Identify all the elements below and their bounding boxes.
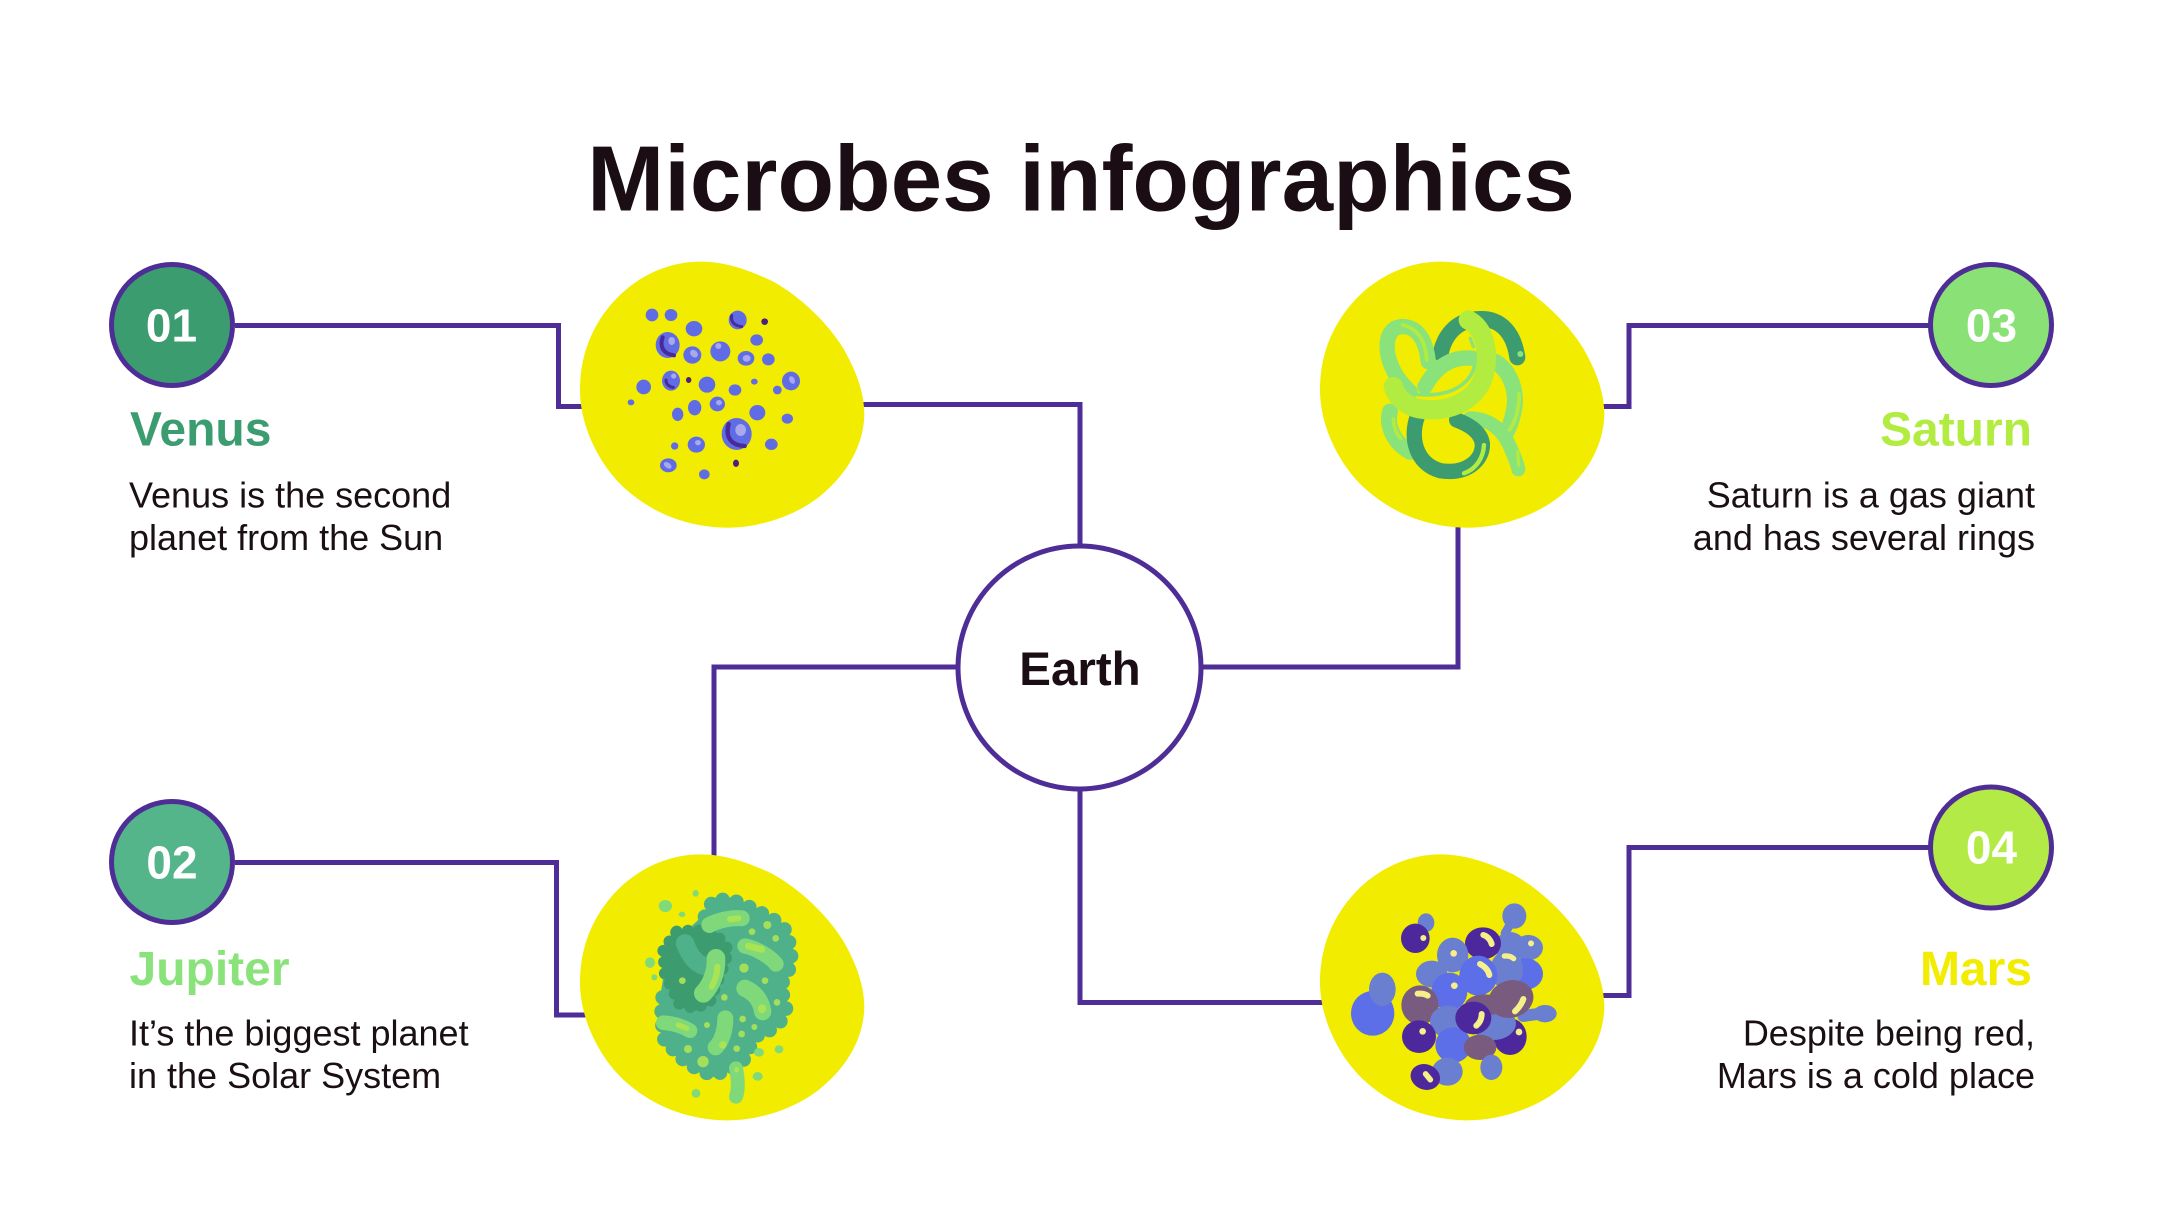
connector: 01 to Venus microbe [235, 326, 590, 406]
connector: 03 to Saturn microbe [1595, 326, 1930, 406]
panel: 03 Saturn [1693, 264, 2052, 558]
number badge 03: 03 [1966, 300, 2017, 352]
center circle: Earth: Earth [1019, 643, 1141, 696]
number badge 02: 02 [146, 836, 198, 888]
text: Venus description: planet from the Sun [129, 517, 443, 558]
icon: Jupiter green bacteria on yellow blob [580, 854, 864, 1120]
number badge 01 [112, 264, 232, 386]
text: Jupiter description: It’s the biggest planet [129, 1012, 469, 1054]
heading: Mars: Mars [1920, 943, 2032, 996]
connector: Earth to Mars microbe [1080, 789, 1330, 1002]
number badge 04: 04 [1966, 822, 2017, 874]
text: Mars description: Despite being red, [1743, 1012, 2035, 1054]
icon: Mars purple microbes on yellow blob [1320, 854, 1604, 1120]
text: Jupiter description: in the Solar System [129, 1055, 441, 1096]
text: Saturn description: and has several rings [1693, 517, 2035, 558]
heading: Saturn: Saturn [1880, 404, 2032, 456]
connector: Saturn microbe to Earth [1200, 520, 1458, 667]
heading: Venus: Venus [130, 404, 271, 456]
connector: 02 to Jupiter microbe [235, 862, 590, 1015]
number badge 02 [112, 802, 232, 922]
text: Venus description: Venus is the second [129, 474, 451, 516]
icon: Saturn worm microbes on yellow blob [1320, 262, 1604, 528]
number badge 04 [1930, 787, 2052, 908]
icon: Venus microbes on yellow blob [580, 262, 864, 528]
panel: 04 Mars [1717, 787, 2052, 1096]
connector: 04 to Mars microbe [1595, 848, 1930, 996]
connector: Jupiter microbe to Earth [714, 667, 957, 860]
title: Microbes infographics [587, 126, 1575, 230]
panel: 01 Venus [112, 264, 451, 558]
connector: Venus microbe to Earth [860, 404, 1080, 546]
center circle: Earth [958, 546, 1201, 789]
panel: 02 Jupiter [112, 802, 469, 1096]
number badge 01: 01 [146, 300, 197, 352]
heading: Jupiter: Jupiter [130, 943, 290, 996]
text: Mars description: Mars is a cold place [1717, 1055, 2035, 1096]
number badge 03 [1930, 264, 2052, 386]
text: Saturn description: Saturn is a gas giant [1707, 474, 2035, 516]
